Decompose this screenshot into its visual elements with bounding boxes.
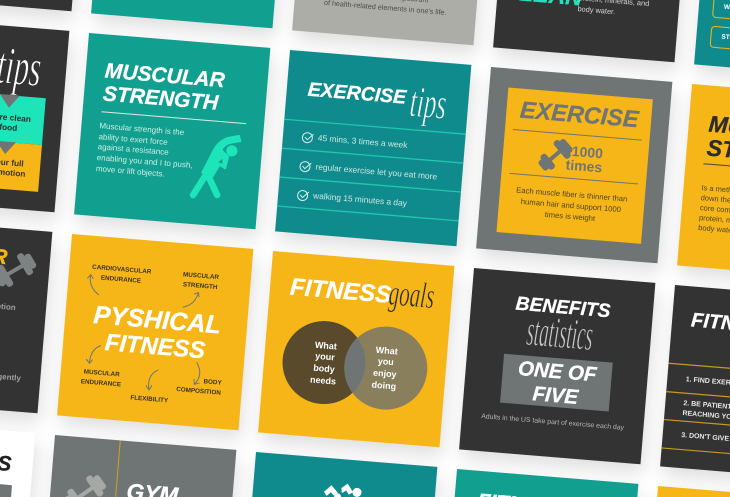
inner yellow panel [496,87,652,243]
text: muscle fiber fact: human hair and support 1000 [521,197,621,214]
heading: exercise: EXERCISE [307,79,407,109]
icon: check 1 [302,132,314,144]
panel: dark teal card bottom [241,452,437,497]
stat: 1000: 1000 [571,142,604,161]
button: stretching [710,26,730,60]
panel: exercise 1000 times card [476,67,672,263]
icon: athlete [324,484,362,497]
text: body composition: body water. [577,4,616,16]
panel: yellow card bottom-right [643,486,730,497]
label: muscular strength: STRENGTH [183,281,218,291]
heading: statistics script: statistics [525,307,595,360]
text: what you enjoy doing: you [377,356,394,368]
list item 2 [682,400,730,424]
panel: dark fitness tips list card [660,285,730,481]
text: mint tip text [0,110,31,133]
list item 3: walking 15 minutes a day [313,190,407,208]
heading [706,111,730,171]
gold vertical rule [105,440,121,497]
panel: benefits statistics card [459,268,655,464]
panel: teal card with yellow outlined buttons [694,0,730,79]
text: what your body needs: your [315,351,335,363]
stat: one of five: ONE OF [517,357,597,386]
block: mint tip [0,86,46,145]
text: definition [698,183,730,235]
label: muscular endurance: MUSCULAR [83,368,120,378]
label: muscular endurance [81,368,121,388]
panel: dark tips card [0,16,69,212]
button: walking [712,0,730,30]
divider [509,172,637,184]
arrows [86,274,200,391]
text: definition: Muscular strength is the [99,121,184,137]
label: body composition [176,378,222,396]
venn diagram [282,321,428,410]
list item 1: 45 mins, 3 times a week [318,133,408,150]
heading: benefits: BENEFITS [515,293,611,322]
dividers [277,118,466,222]
panel: teal card bottom [442,469,638,497]
text: what you enjoy doing: enjoy [373,368,397,380]
panel: gym card [40,435,236,497]
list item 2: regular exercise let you eat more [315,162,438,181]
stat box [500,354,613,412]
panel: fitness goals card [258,251,454,447]
icon: check 3 [297,190,310,201]
icon: dumbbell [66,475,106,497]
panel: yellow body composition card [677,84,730,280]
label: body composition: COMPOSITION [176,386,221,396]
text: what your body needs: needs [310,374,336,386]
label: body composition: BODY [203,378,222,386]
stat: times: times [565,156,603,175]
panel: dark card top with body composition text [493,0,689,62]
heading: muscular strength: MUSCULAR [104,59,226,92]
text: what you enjoy doing: doing [371,379,396,391]
label: muscular strength [183,271,219,291]
icon: grey triangle markers [0,94,20,154]
label: cardiovascular endurance: ENDURANCE [101,275,141,285]
label: cardiovascular endurance: CARDIOVASCULAR [92,264,152,276]
dividers [662,362,730,454]
text: yellow tip text [0,156,26,179]
panel: dark card top-left corner [0,0,86,11]
label: muscular endurance: ENDURANCE [81,378,121,388]
caption: Adults in the US take part of exercise each day [481,413,624,432]
text: definition: against a resistance [97,143,169,157]
panel: muscular strength card [74,33,270,229]
text: definition: enabling you and I to push, [96,153,193,170]
icon: dumbbell [538,139,573,170]
text: muscle fiber fact: Each muscle fiber is thinner than [516,185,628,204]
heading: pyshical fitness [92,301,222,364]
text: body composition [577,0,650,16]
stat: one of five [517,357,598,408]
label: muscular strength: MUSCULAR [183,271,219,281]
panel: exercise tips card [275,50,471,246]
grey box [0,474,12,497]
label: flexibility: FLEXIBILITY [130,394,168,404]
heading: goals script: goals [387,273,436,317]
text: muscle fiber fact: times is weight [545,210,596,223]
text: definition: move or lift objects. [96,164,165,178]
heading: pyshical fitness: FITNESS [104,329,206,364]
text: what you enjoy doing [371,344,398,392]
heading: tips script: tips [408,78,448,129]
panel: white card bottom-left [0,418,35,497]
text: muscle fiber fact [516,185,628,223]
text: what your body needs: What [315,339,337,351]
text: definition [96,121,193,178]
text: what your body needs [310,339,337,386]
panel: teal card top [91,0,287,28]
divider [102,111,246,124]
panel: physical fitness card [57,234,253,430]
block: yellow tip [0,133,42,192]
stat: one of five: FIVE [532,382,579,408]
label: cardiovascular endurance [92,264,152,285]
heading: muscular strength: STRENGTH [102,82,219,114]
icon: dumbbell [0,253,36,287]
icon: check 2 [300,161,312,172]
text: what your body needs: body [313,363,335,375]
heading: fitness: FITNESS [289,274,392,309]
heading: muscular strength [102,59,226,114]
text: what you enjoy doing: What [375,344,398,356]
divider [703,163,730,176]
divider [512,129,641,141]
panel: grey card top [292,0,488,45]
text: definition: ability to exert force [98,132,168,147]
heading: pyshical fitness: PYSHICAL [92,301,222,339]
panel: dark dumbbell card [0,217,52,413]
icon: stretching figure [190,134,242,198]
heading: exercise: EXERCISE [519,96,640,132]
